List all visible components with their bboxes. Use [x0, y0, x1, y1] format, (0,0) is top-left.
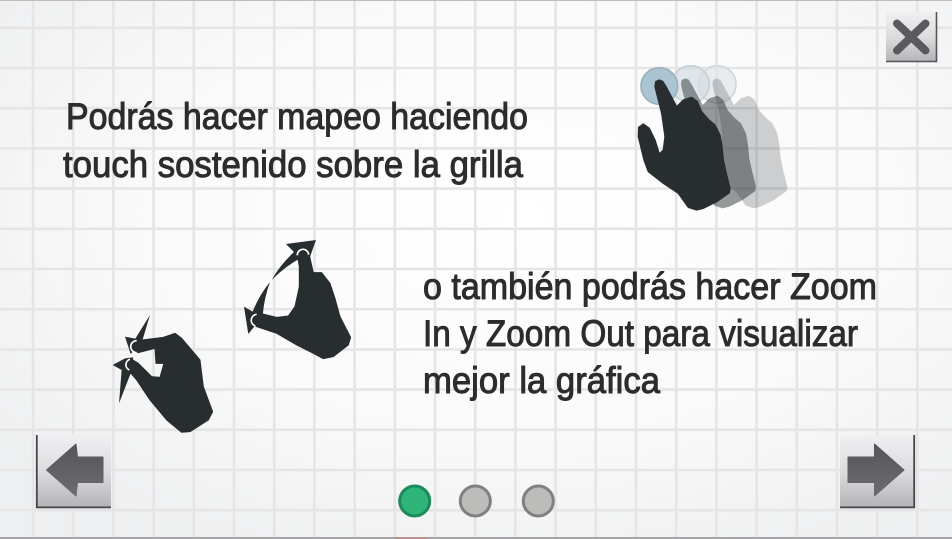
previous arrow button [36, 435, 111, 508]
instruction text: zoom [423, 266, 877, 401]
close button [886, 12, 937, 62]
instruction text: mapping: Podrás hacer mapeo haciendo [66, 96, 528, 137]
next arrow button [840, 435, 915, 508]
instruction text: mapping: touch sostenido sobre la grilla [63, 144, 523, 185]
instruction text: zoom: o también podrás hacer Zoom [423, 266, 877, 307]
instruction text: zoom: mejor la gráfica [423, 360, 660, 401]
icon: touch and hold hand [638, 66, 787, 210]
icon: pinch in hand [113, 315, 213, 432]
instruction text: zoom: In y Zoom Out para visualizar [423, 313, 858, 354]
icon: pinch out hand [244, 240, 351, 359]
instruction text: mapping [63, 96, 528, 185]
pagination dots [400, 486, 553, 516]
